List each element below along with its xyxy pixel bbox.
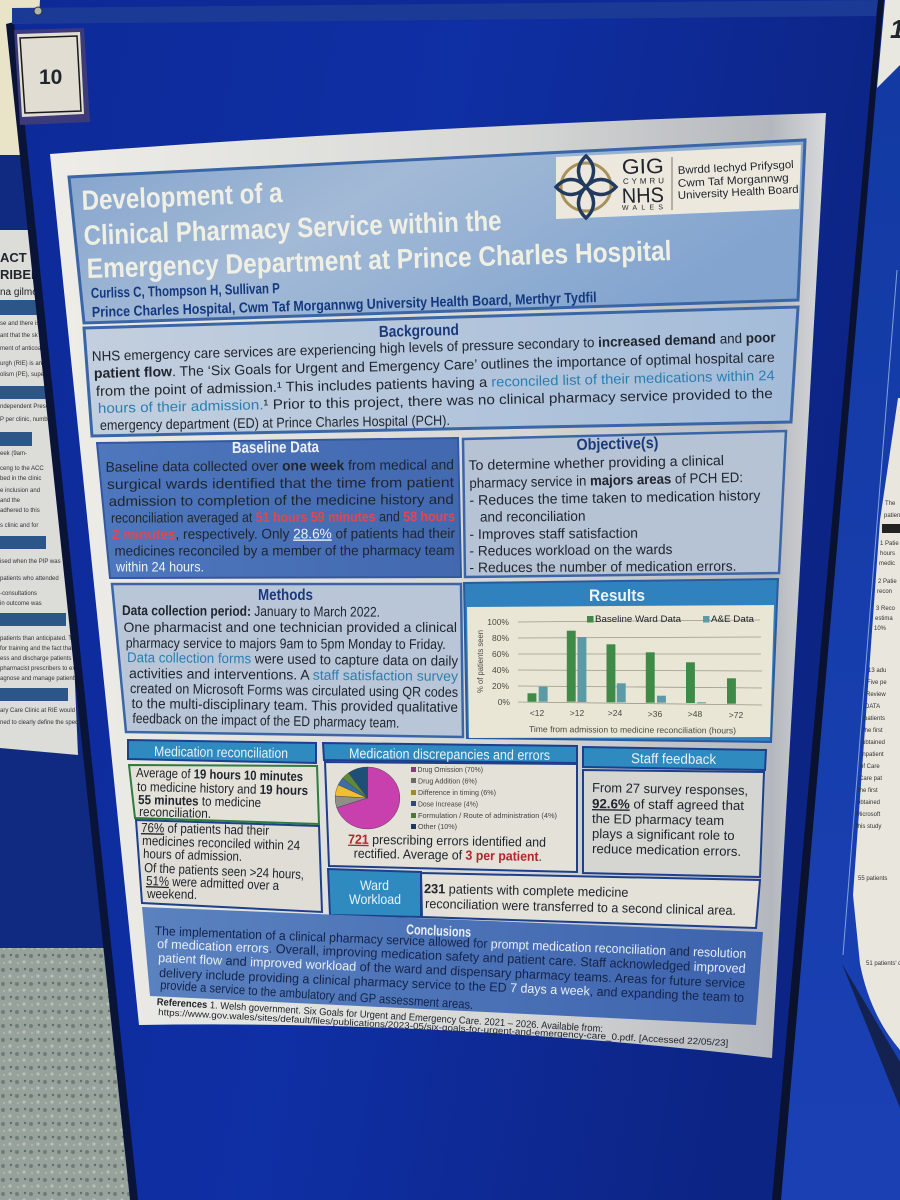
methods text: Data collection period: January to March 2022. <box>122 602 380 620</box>
y axis labels: 100% <box>487 617 509 627</box>
right-hand display board: obtained <box>857 800 880 806</box>
background text: from the point of admission.¹ This includes patients having a reconciled list of their medications within 24 <box>96 367 775 399</box>
objectives list: - Reduces the number of medication errors. <box>469 558 737 575</box>
poster sheet <box>50 113 826 1058</box>
background text <box>92 329 776 433</box>
neighbouring poster on the left: ary Care Clinic at RIE would be bet <box>0 708 94 714</box>
panel: results <box>464 579 778 742</box>
neighbouring poster on the left: patients who attended <box>0 576 59 582</box>
baseline text: 2 minutes, respectively. Only 28.6% of patients had their <box>112 525 455 542</box>
header: medication reconciliation: Medication reconciliation <box>154 743 288 761</box>
conclusions text: of medication errors. Overall, improving medication safety and patient care. Staff acknowledged improved <box>157 936 746 976</box>
lower box: admission outcomes: weekend. <box>146 886 197 902</box>
neighbouring poster on the left: e inclusion and <box>0 488 40 494</box>
methods text: Data collection forms were used to capture data on daily <box>127 649 458 669</box>
neighbouring poster on the left: -consultations <box>0 591 37 597</box>
authors and affiliation: Prince Charles Hospital, Cwm Taf Morgannwg University Health Board, Merthyr Tydfil <box>92 290 597 321</box>
green box: average times: to medicine history and 19 hours <box>137 779 308 798</box>
neighbouring poster on the left: ned to clearly define the specific <box>0 720 85 726</box>
poster title: Development of a <box>81 177 283 216</box>
icon: celtic knot <box>556 156 616 218</box>
y axis labels <box>475 617 510 707</box>
right-hand display board: Microsoft <box>856 812 881 818</box>
x axis labels: >24 <box>608 708 622 718</box>
lower box: admission outcomes: 76% of patients had their <box>141 820 270 838</box>
right-hand display board: 10% <box>874 626 887 632</box>
board number card: 10 <box>39 66 62 89</box>
neighbouring poster on the left: and the <box>0 498 21 504</box>
lower box: admission outcomes <box>136 820 322 912</box>
logo wordmark: Cwm Taf Morgannwg <box>678 172 789 190</box>
heading: methods: Methods <box>258 587 313 604</box>
ward workload text: reconciliation were transferred to a second clinical area. <box>425 896 736 918</box>
green box: average times: 55 minutes to medicine <box>138 792 261 810</box>
panel: methods <box>112 584 463 737</box>
pie legend: Formulation / Route of administration (4%) <box>418 811 557 820</box>
board number card <box>14 28 90 125</box>
errors summary text <box>348 832 546 864</box>
pie legend: Dose Increase (4%) <box>418 800 478 809</box>
logo wordmark <box>622 155 799 212</box>
label: ward workload: Ward <box>360 877 389 893</box>
panel: background <box>84 307 798 436</box>
y axis labels: 40% <box>492 665 509 675</box>
ward workload text: 231 patients with complete medicine <box>424 881 629 900</box>
baseline text: surgical wards identified that the time from patient <box>107 474 454 492</box>
background text: patient flow. The ‘Six Goals for Urgent and Emergency Care’ outlines the importance of optimal hospital care <box>94 349 775 381</box>
y axis labels: % of patients seen <box>475 630 485 693</box>
pie legend: Drug Addition (6%) <box>418 776 477 785</box>
logo wordmark: CYMRU <box>623 176 664 186</box>
methods text: pharmacy service to majors 9am to 5pm Monday to Friday. <box>126 635 446 652</box>
x axis labels: Time from admission to medicine reconciliation (hours) <box>529 724 736 735</box>
heading: results: Results <box>589 586 645 605</box>
x axis labels: >48 <box>688 709 702 719</box>
right-hand display board <box>770 0 900 1200</box>
baseline text <box>106 456 455 575</box>
neighbouring poster on the left: bed in the clinic <box>0 476 41 482</box>
logo wordmark: NHS <box>622 184 664 208</box>
y axis labels: 0% <box>498 697 510 707</box>
panel: staff feedback <box>583 747 766 877</box>
neighbouring poster on the left: P per clinic, numbe <box>0 417 52 423</box>
right-hand display board: The <box>885 501 896 507</box>
right-hand display board: DATA <box>865 704 880 710</box>
methods text <box>122 602 458 731</box>
staff feedback text: From 27 survey responses, <box>592 780 748 798</box>
right-hand display board: 2 Patie <box>878 579 897 585</box>
objectives list <box>468 452 761 575</box>
right-hand display board: 1 Patie <box>880 541 899 547</box>
panel: ward workload <box>328 869 760 928</box>
x axis labels: <12 <box>530 708 544 718</box>
staff feedback text: 92.6% of staff agreed that <box>592 796 744 813</box>
staff feedback text: the ED pharmacy team <box>592 811 724 828</box>
panel: medication discrepancies and errors <box>323 743 577 872</box>
x axis labels: >12 <box>570 708 584 718</box>
background text: hours of their admission. ¹ Prior to this project, there was no clinical pharmacy service provided to the <box>98 385 773 416</box>
poster title <box>81 177 672 284</box>
staff feedback text <box>592 780 748 859</box>
green box: average times: Average of 19 hours 10 minutes <box>136 765 303 784</box>
pie legend <box>411 765 557 831</box>
chart legend: A&E Data <box>711 614 754 624</box>
conclusions text <box>154 923 747 1012</box>
header: medication discrepancies and errors: Medication discrepancies and errors <box>349 745 550 763</box>
right-hand display board: Five pe <box>867 680 887 686</box>
objectives list: - Improves staff satisfaction <box>469 525 638 542</box>
right-hand display board: hours <box>880 551 895 557</box>
neighbouring poster on the left: patients than anticipated. This <box>0 636 80 642</box>
logo wordmark: GIG <box>622 155 664 179</box>
conclusions text: provide a service to the ambulatory and GP assessment areas. <box>160 977 474 1012</box>
poster title: Emergency Department at Prince Charles Hospital <box>86 235 672 284</box>
y axis labels: 20% <box>492 681 509 691</box>
baseline text: reconciliation averaged at 51 hours 59 minutes and 58 hours <box>111 508 455 526</box>
x axis labels: >72 <box>729 710 743 720</box>
background text: emergency department (ED) at Prince Charles Hospital (PCH). <box>100 412 450 433</box>
right-hand display board: recon <box>877 589 892 595</box>
staff feedback text: reduce medication errors. <box>592 841 741 859</box>
methods text: activities and interventions. A staff satisfaction survey <box>129 665 458 684</box>
conclusions text: patient flow and improved workload of the ward and dispensary pharmacy teams. Areas for future service <box>158 950 746 991</box>
authors and affiliation: Curliss C, Thompson H, Sullivan P <box>91 281 280 302</box>
neighbouring poster on the left: adhered to this <box>0 508 40 514</box>
health board logo <box>556 145 801 219</box>
neighbouring poster on the left: na gilmo <box>0 287 38 298</box>
lower box: admission outcomes: 51% were admitted over a <box>146 873 280 893</box>
lower box: admission outcomes: Of the patients seen >24 hours, <box>144 860 304 882</box>
right-hand display board: of Care <box>860 764 880 770</box>
right-hand display board: the first <box>858 788 878 794</box>
right-hand display board: the first <box>863 728 883 734</box>
y axis labels: 80% <box>492 633 509 643</box>
right-hand display board: medic <box>879 561 895 567</box>
pie legend: Other (10%) <box>418 822 457 831</box>
chart legend <box>587 614 754 624</box>
lower box: admission outcomes: hours of admission. <box>143 846 242 864</box>
methods text: to the multi-disciplinary team. This provided qualitative <box>131 695 458 715</box>
pie chart: error types <box>335 767 400 829</box>
neighbouring poster on the left: for training and the fact that the <box>0 646 84 652</box>
panel: baseline data <box>97 438 461 578</box>
pie legend: Difference in timing (6%) <box>418 788 496 797</box>
label: ward workload <box>328 869 421 917</box>
header: staff feedback <box>583 747 766 770</box>
neighbouring poster on the left: eek (9am- <box>0 451 27 457</box>
neighbouring poster on the left: ised when the PIP was <box>0 559 61 565</box>
chart legend: Baseline Ward Data <box>595 614 681 624</box>
methods text: created on Microsoft Forms was circulated using QR codes <box>130 680 458 700</box>
label: ward workload: Workload <box>349 891 401 907</box>
neighbouring poster on the left: ess and discharge patients to <box>0 656 79 662</box>
header: staff feedback: Staff feedback <box>631 750 717 767</box>
methods text: feedback on the impact of the ED pharmacy team. <box>132 710 400 731</box>
neighbouring poster on the left: ment of anticoa <box>0 346 42 352</box>
right-hand display board: patien <box>884 513 900 519</box>
right-hand display board: inpatient <box>861 752 884 758</box>
heading: background: Background <box>379 322 459 341</box>
lower box: admission outcomes: medicines reconciled within 24 <box>142 833 300 853</box>
pie legend: Drug Omission (70%) <box>418 765 483 774</box>
heading: baseline data: Baseline Data <box>232 439 319 457</box>
neighbouring poster on the left: agnose and manage patients <box>0 676 77 682</box>
right-hand display board: 3 Reco <box>876 606 896 612</box>
methods text: One pharmacist and one technician provided a clinical <box>124 619 457 635</box>
errors summary text: 721 prescribing errors identified and <box>348 832 546 850</box>
logo wordmark: University Health Board <box>678 184 799 202</box>
bar chart: time from admission to medicine reconciliation <box>467 605 774 738</box>
neighbouring poster on the left: ACT C <box>0 250 40 265</box>
right-hand display board: patients <box>864 716 885 722</box>
neighbouring poster on the left: se and there is <box>0 321 39 327</box>
neighbouring poster on the left: olism (PE), supe <box>0 372 45 378</box>
baseline text: medicines reconciled by a member of the pharmacy team <box>114 542 455 559</box>
green box: average times: reconciliation. <box>139 804 211 821</box>
heading: objectives: Objective(s) <box>576 435 659 454</box>
background text: NHS emergency care services are experiencing high levels of pressure secondary to increased demand and poor <box>92 329 776 364</box>
right-hand display board: estima <box>875 616 893 622</box>
logo wordmark: Bwrdd Iechyd Prifysgol <box>678 159 794 177</box>
right-hand display board: Review <box>866 692 886 698</box>
neighbouring poster on the left <box>0 230 94 755</box>
errors summary text: rectified. Average of 3 per patient. <box>354 846 542 864</box>
poster title: Clinical Pharmacy Service within the <box>83 205 502 251</box>
panel: medication reconciliation <box>128 740 322 912</box>
x axis labels <box>529 708 743 735</box>
objectives list: - Reduces the time taken to medication history <box>469 487 761 508</box>
right-hand display board: Care pat <box>859 776 882 782</box>
panel: objectives <box>463 431 786 577</box>
neighbouring poster on the left: ant that the sk <box>0 333 39 339</box>
baseline text: within 24 hours. <box>115 559 204 575</box>
right-hand display board: 55 patients <box>858 876 887 882</box>
references: References 1. Welsh government. Six Goals for Urgent and Emergency Care. 2021 – 2026. Available from: <box>156 997 603 1035</box>
objectives list: - Reduces workload on the wards <box>469 541 673 559</box>
references <box>156 997 729 1048</box>
neighbouring poster on the left: pharmacist prescribers to extend <box>0 666 87 672</box>
header panel <box>69 140 805 323</box>
neighbouring poster on the left: in outcome was <box>0 601 42 607</box>
neighbouring poster on the left: ndependent Presc <box>0 404 49 410</box>
x axis labels: >36 <box>648 709 662 719</box>
objectives list: and reconciliation <box>480 508 586 525</box>
right-hand display board: this study <box>856 824 881 830</box>
references: https://www.gov.wales/sites/default/files/publications/2023-05/six-goals-for-urgent-and-emergency-care_0.pdf. [Accessed 22/05/23] <box>158 1007 729 1048</box>
right-hand display board: 13 adu <box>868 668 886 674</box>
neighbouring poster on the left: urgh (RIE) is an <box>0 361 42 367</box>
logo wordmark: WALES <box>622 204 663 212</box>
y axis labels: 60% <box>492 649 509 659</box>
conclusions text: delivery include providing a clinical pharmacy service to the ED 7 days a week, and expanding the team to <box>159 965 744 1005</box>
neighbouring poster on the left: ceng to the ACC <box>0 466 44 472</box>
header: medication reconciliation <box>128 740 316 763</box>
baseline text: Baseline data collected over one week from medical and <box>106 456 454 475</box>
neighbouring poster on the left: s clinic and for <box>0 523 38 529</box>
baseline text: admission to completion of the medicine history and <box>109 491 454 509</box>
right-hand display board: obtained <box>862 740 885 746</box>
staff feedback text: plays a significant role to <box>592 826 735 843</box>
neighbouring poster on the left: RIBER <box>0 267 41 282</box>
green box: average times <box>129 765 319 824</box>
ward workload text <box>421 873 760 928</box>
objectives list: pharmacy service in majors areas of PCH ED: <box>469 469 743 491</box>
panel: conclusions <box>142 907 763 1025</box>
conclusions text: The implementation of a clinical pharmacy service allowed for prompt medication reconciliation and resolution <box>154 923 747 961</box>
objectives list: To determine whether providing a clinical <box>468 452 724 473</box>
heading: conclusions: Conclusions <box>406 921 472 940</box>
